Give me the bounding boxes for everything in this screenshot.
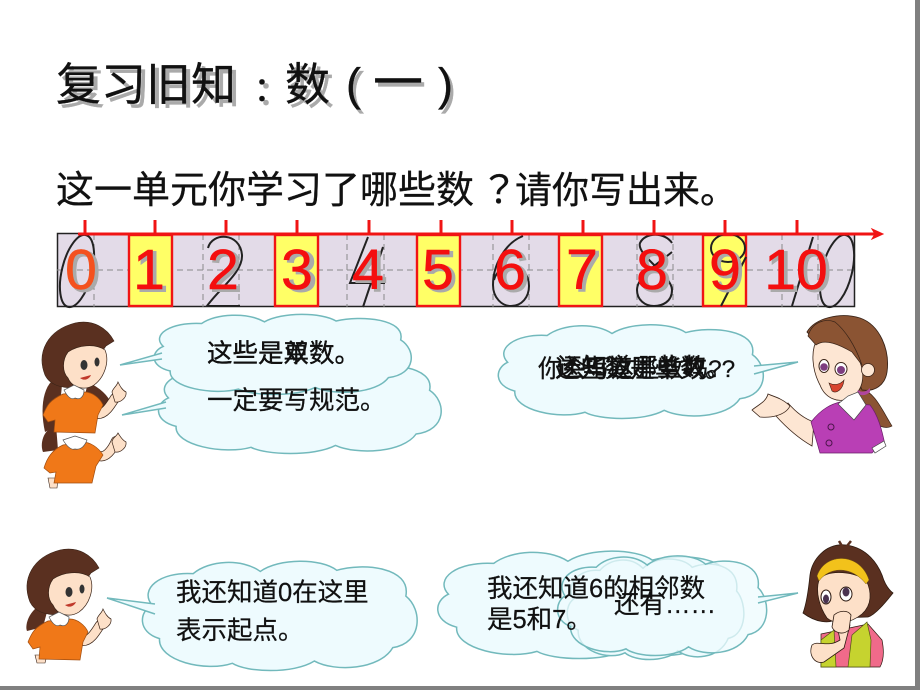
red digits 0 to 10: 2 (207, 238, 239, 302)
digit shadows: 9 (712, 240, 744, 304)
speech bubble: neighbours of six: 还有…… (614, 591, 716, 619)
digit shadows: 4 (355, 240, 387, 304)
digit shadows: 1 (136, 240, 168, 304)
title (56, 55, 456, 117)
digit shadows: 5 (425, 240, 457, 304)
red digits 0 to 10 (65, 238, 828, 302)
yellow odd-number boxes (129, 235, 746, 306)
question text: 请你写出来。 (515, 170, 737, 211)
writing grid strip (57, 234, 855, 307)
speech bubble: zero as start: 我还知道0在这里 (176, 579, 369, 607)
speech bubble: zero as start (107, 561, 417, 671)
question text: 这一单元你学习了哪些数 (56, 170, 474, 212)
question text (56, 159, 737, 214)
digit shadows: 3 (285, 240, 317, 304)
character: upper girl pointing (42, 322, 126, 433)
digit shadows: 2 (210, 240, 242, 304)
digit shadows: 8 (639, 240, 671, 304)
title: 一 (373, 55, 423, 111)
red digits 0 to 10: 1 (133, 238, 165, 302)
character: teacher (752, 316, 892, 453)
digit shadows: 10 (767, 240, 831, 304)
title: ) (438, 59, 453, 110)
title: 一 (376, 59, 426, 115)
speech bubble: odd numbers: 这些是双数。 (207, 340, 360, 368)
text: write neatly: 一定要写规范。 (207, 387, 386, 415)
red digits 0 to 10: 8 (636, 238, 668, 302)
character: lower girl pointing (42, 425, 126, 488)
red digits 0 to 10: 0 (65, 238, 97, 302)
digit shadows: 0 (68, 240, 100, 304)
red digits 0 to 10: 6 (494, 238, 526, 302)
title: 复习旧知 (60, 63, 240, 114)
speech bubble: odd numbers (120, 314, 411, 394)
title: ) (441, 63, 456, 114)
red digits 0 to 10: 4 (352, 238, 384, 302)
speech bubble: odd numbers: 这些是单数。 (207, 340, 360, 368)
red digits 0 to 10: 10 (764, 238, 828, 302)
character: bottom girl pointing (26, 549, 111, 663)
title: 复习旧知 (56, 59, 236, 110)
speech bubble: zero as start: 表示起点。 (176, 617, 304, 645)
question text: ？ (480, 159, 518, 214)
speech bubble: write neatly (122, 361, 441, 453)
number line chart (53, 220, 883, 311)
red digits 0 to 10: 3 (281, 238, 313, 302)
digit shadows: 6 (497, 240, 529, 304)
speech bubble: teacher questions: 还知道哪些数。 (557, 354, 732, 382)
red digits 0 to 10: 5 (422, 238, 454, 302)
handwriting guide strokes (53, 231, 861, 311)
speech bubble: teacher questions (498, 325, 798, 418)
speech bubble: teacher questions: 你会写这些数吗?? (538, 356, 735, 383)
speech bubble: neighbours of six: 我还知道6的相邻数 (487, 575, 705, 603)
title: 数 (289, 63, 334, 114)
digit shadows (68, 240, 831, 304)
speech bubble: neighbours of six (438, 551, 798, 660)
speech bubble: neighbours of six: 是5和7。 (487, 606, 592, 634)
title: ： (245, 64, 279, 113)
red digits 0 to 10: 9 (709, 238, 741, 302)
title: ( (346, 59, 361, 110)
digit shadows: 7 (569, 240, 601, 304)
speech bubble: teacher questions: 这些数是单数。 (555, 355, 730, 383)
axis with ticks and arrow (78, 220, 883, 239)
title: 数 (285, 59, 330, 110)
character: thinking girl (803, 541, 893, 667)
title: ( (349, 63, 364, 114)
title: ： (249, 68, 283, 117)
red digits 0 to 10: 7 (566, 238, 598, 302)
